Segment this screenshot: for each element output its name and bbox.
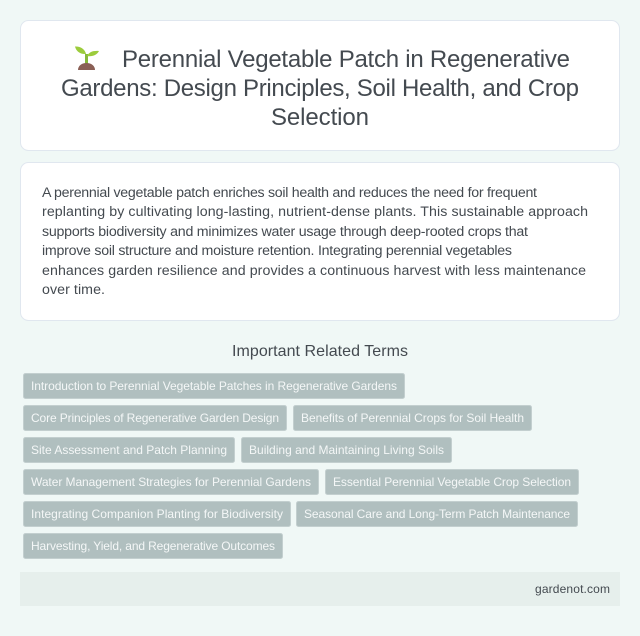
tag: Water Management Strategies for Perennial Gardens	[31, 475, 311, 489]
summary text: A perennial vegetable patch enriches soil health and reduces the need for frequent	[42, 185, 537, 201]
footer bar	[20, 572, 620, 606]
tag: Core Principles of Regenerative Garden Design	[31, 411, 279, 425]
summary text: improve soil structure and moisture retention. Integrating perennial vegetables	[42, 243, 512, 259]
title text: Perennial Vegetable Patch in Regenerative	[122, 46, 570, 73]
tag	[296, 502, 578, 526]
heading: related terms: Important Related Terms	[232, 343, 408, 360]
icon: seedling	[75, 46, 99, 70]
tag	[24, 438, 234, 462]
tag: Building and Maintaining Living Soils	[249, 443, 444, 457]
panel: title card	[20, 20, 620, 150]
title text: Gardens: Design Principles, Soil Health, and Crop	[61, 75, 579, 102]
tag	[24, 406, 286, 430]
tag	[24, 502, 290, 526]
tag: Site Assessment and Patch Planning	[31, 443, 227, 457]
tag: Essential Perennial Vegetable Crop Selection	[333, 475, 571, 489]
tag: Introduction to Perennial Vegetable Patches in Regenerative Gardens	[31, 379, 397, 393]
tag	[326, 470, 578, 494]
tag	[242, 438, 452, 462]
tag	[24, 470, 318, 494]
panel: summary paragraph	[20, 162, 620, 320]
summary text: supports biodiversity and minimizes water usage through deep-rooted crops that	[42, 224, 528, 240]
tag: Seasonal Care and Long-Term Patch Maintenance	[304, 507, 570, 521]
summary text: over time.	[42, 282, 105, 298]
title text: Selection	[271, 104, 369, 131]
title text	[61, 46, 579, 131]
tag list	[24, 374, 578, 558]
summary text: enhances garden resilience and provides a continuous harvest with less maintenance	[42, 263, 586, 279]
tag: Benefits of Perennial Crops for Soil Health	[301, 411, 524, 425]
tag: Harvesting, Yield, and Regenerative Outcomes	[31, 539, 275, 553]
summary text: replanting by cultivating long-lasting, nutrient-dense plants. This sustainable approach	[42, 204, 588, 220]
tag	[294, 406, 532, 430]
tag	[24, 534, 282, 558]
footer bar: gardenot.com	[535, 582, 610, 596]
tag: Integrating Companion Planting for Biodiversity	[31, 507, 283, 521]
tag	[24, 374, 404, 398]
summary text	[42, 185, 588, 298]
